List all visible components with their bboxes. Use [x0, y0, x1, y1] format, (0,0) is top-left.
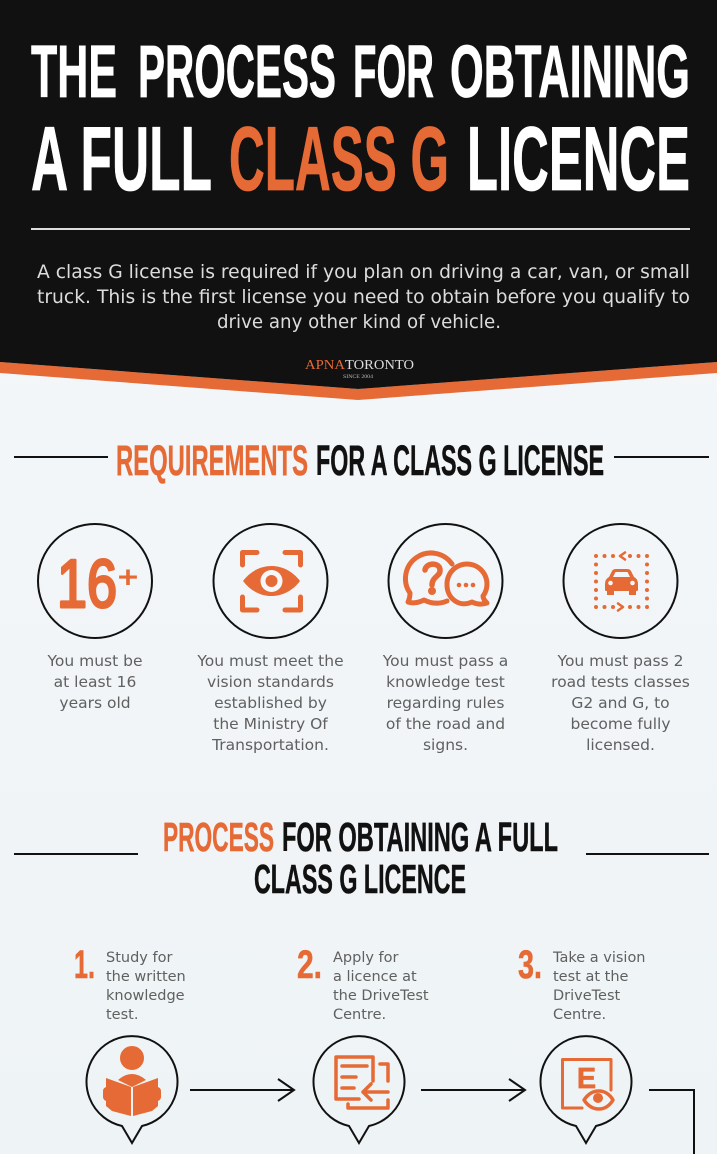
step number: 3. [518, 943, 542, 987]
step text: test. [106, 1007, 138, 1023]
requirement text: You must meet the [196, 652, 344, 670]
icon: 16 plus [38, 524, 152, 638]
requirement text [551, 652, 690, 754]
requirement 3: knowledge [382, 524, 508, 754]
heading: process: CLASS G LICENCE [254, 856, 466, 902]
requirement text: regarding rules [387, 694, 504, 712]
requirement 2: vision [196, 524, 344, 754]
logo: TORONTO [345, 358, 414, 373]
heading: process [14, 814, 709, 902]
header band [0, 0, 717, 400]
icon: 16 plus: 16 [57, 546, 117, 622]
requirement text: established by [214, 694, 327, 712]
requirement text: You must pass a [382, 652, 508, 670]
requirement text: become fully [570, 715, 671, 733]
step text [333, 950, 429, 1023]
requirement 4: road tests [551, 524, 690, 754]
step text: Apply for [333, 950, 399, 966]
heading: requirements [14, 437, 709, 485]
icon: eye chart [541, 1036, 632, 1143]
icon: 16 plus: + [118, 561, 138, 594]
connector line [649, 1090, 694, 1154]
step text: Centre. [333, 1007, 386, 1023]
icon: speech bubbles [388, 524, 502, 638]
step text: a licence at [333, 969, 417, 985]
title: FOR [353, 30, 434, 113]
step text: DriveTest [553, 988, 621, 1004]
step text: test at the [553, 969, 629, 985]
requirement text: of the road and [386, 715, 505, 733]
logo: APNA [305, 358, 346, 373]
icon: reader with book [87, 1036, 178, 1143]
step text: the written [106, 969, 186, 985]
requirement text: licensed. [586, 736, 655, 754]
requirement text: signs. [423, 736, 468, 754]
title: PROCESS [138, 30, 336, 113]
step text: Study for [106, 950, 172, 966]
step text [106, 950, 186, 1023]
step text: the DriveTest [333, 988, 429, 1004]
requirement text: at least 16 [54, 673, 136, 691]
logo: SINCE 2004 [343, 375, 374, 380]
step text [552, 950, 646, 1023]
requirement text: knowledge test [386, 673, 505, 691]
step number: 1. [74, 943, 95, 987]
requirement text: You must be [46, 652, 143, 670]
intro text: drive any other kind of vehicle. [217, 311, 501, 333]
requirement text: Transportation. [211, 736, 329, 754]
requirement text: road tests classes [551, 673, 690, 691]
step text: knowledge [106, 988, 185, 1004]
step 2 [297, 943, 429, 1143]
requirement text: G2 and G, to [571, 694, 670, 712]
requirement text [46, 652, 143, 712]
title: A FULL [31, 109, 212, 210]
intro text: truck. This is the first license you need to obtain before you qualify to [37, 286, 690, 308]
requirement text [196, 652, 344, 754]
icon: document with arrow [314, 1036, 404, 1143]
requirement text: the Ministry Of [213, 715, 328, 733]
arrow 1 [190, 1079, 294, 1101]
intro text [37, 261, 690, 333]
step 1 [74, 943, 186, 1143]
requirement text: You must pass 2 [557, 652, 683, 670]
title [31, 30, 690, 210]
title: THE [31, 30, 117, 113]
title: CLASS G [229, 109, 449, 210]
heading: process: PROCESS [163, 814, 274, 860]
arrow 2 [421, 1079, 525, 1101]
requirement text [382, 652, 508, 754]
logo [305, 358, 414, 380]
icon: eye [214, 524, 328, 638]
requirement text: vision standards [207, 673, 334, 691]
requirement text: years old [59, 694, 131, 712]
heading: requirements: REQUIREMENTS [116, 437, 308, 485]
requirement 1: age [38, 524, 152, 712]
step text: Take a vision [552, 950, 646, 966]
step 3 [518, 943, 646, 1143]
icon: eye chart: E [577, 1063, 596, 1095]
intro text: A class G license is required if you plan on driving a car, van, or small [37, 261, 690, 283]
step number: 2. [297, 943, 322, 987]
step text: Centre. [553, 1007, 606, 1023]
icon: car on dotted track [564, 524, 678, 638]
